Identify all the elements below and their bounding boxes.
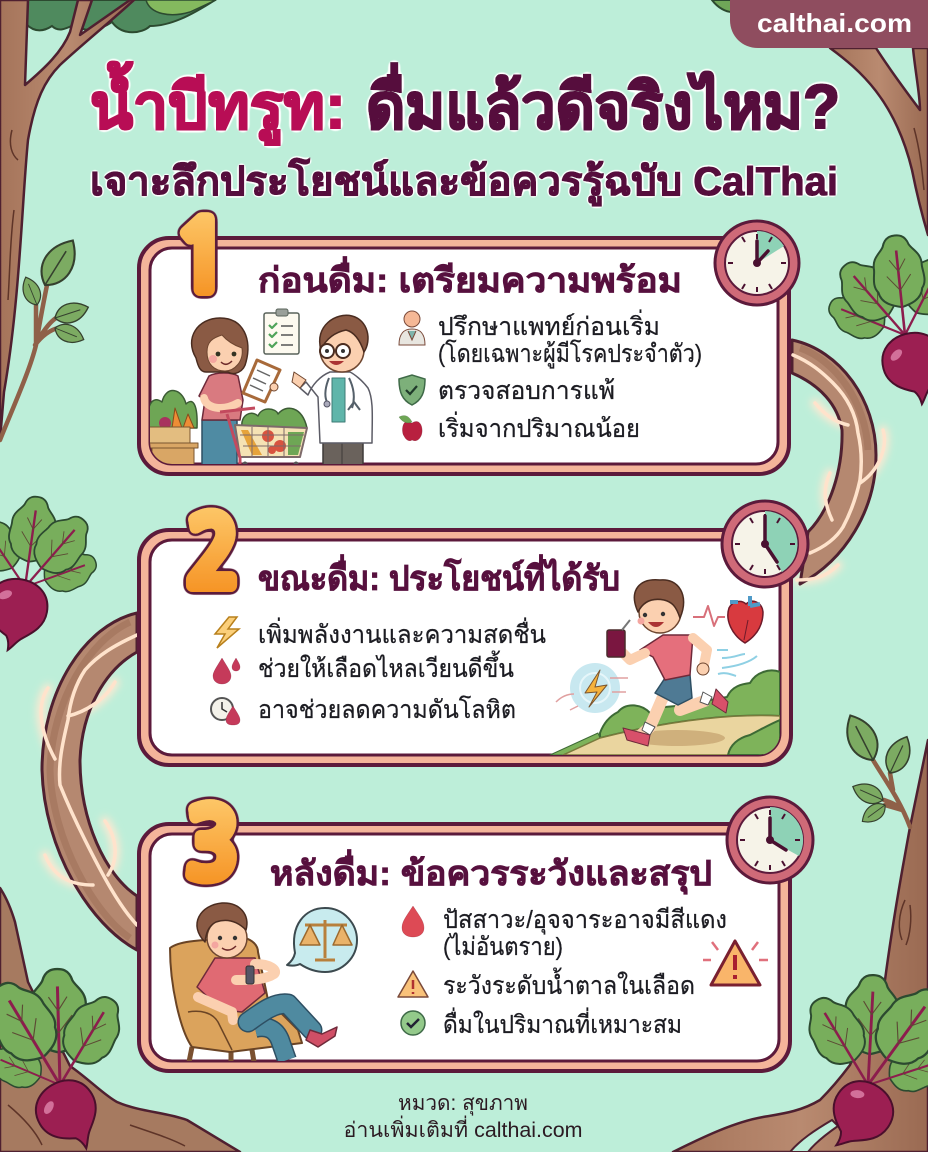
number 1: 1 [173, 210, 231, 305]
panel 2 heading: ขณะดื่ม: ประโยชน์ที่ได้รับ [258, 554, 620, 598]
icon: bolt [215, 617, 239, 648]
number 2: 2 [186, 506, 240, 601]
panel 1 list [399, 309, 702, 443]
beet: bottom right [796, 974, 928, 1152]
beet: left middle [0, 494, 102, 656]
tree: bottom right [673, 740, 928, 1152]
footer category: หมวด: สุขภาพ [398, 1092, 528, 1116]
twig with leaves: left [0, 233, 91, 440]
panel 2 illustration [550, 580, 780, 755]
item: start small: เริ่มจากปริมาณน้อย [438, 411, 640, 443]
twig with leaves: right [838, 709, 917, 828]
icon: shield [399, 375, 425, 405]
item: moderation: ดื่มในปริมาณที่เหมาะสม [443, 1007, 682, 1039]
woman's clipboard [243, 360, 280, 402]
item: consult doctor: ปรึกษาแพทย์ก่อนเริ่ม [438, 309, 660, 341]
panel 2 frame [139, 530, 791, 765]
item: energy: เพิ่มพลังงานและความสดชื่น [258, 617, 546, 649]
tree: bottom left [0, 888, 240, 1152]
title: ดื่มแล้วดีจริงไหม? [366, 63, 840, 142]
warning sign [703, 941, 768, 985]
foliage: top canopy [25, 0, 732, 32]
panel 1 frame [139, 238, 789, 474]
connector vine: panel 2 to panel 3 [41, 613, 137, 950]
number 3: 3 [185, 798, 239, 893]
scale bubble [287, 908, 357, 972]
clock 1 [715, 221, 799, 305]
footer link: อ่านเพิ่มเติมที่ calthai.com [344, 1115, 582, 1142]
heart [693, 596, 763, 643]
motion lines [717, 650, 757, 676]
armchair [170, 938, 302, 1062]
item: blood pressure: อาจช่วยลดความดันโลหิต [258, 695, 516, 724]
brand badge [730, 0, 928, 48]
beet: bottom left [0, 968, 133, 1152]
icon: warning small [398, 971, 428, 997]
item: urine note: (ไม่อันตราย) [443, 932, 563, 961]
energy orb [556, 663, 628, 713]
connector vine: panel 1 to panel 2 [792, 340, 884, 584]
panel 1 illustration [148, 309, 372, 466]
hill and bushes [550, 670, 780, 755]
item: allergy check: ตรวจสอบการแพ้ [438, 377, 615, 405]
panel 1 heading: ก่อนดื่ม: เตรียมความพร้อม [258, 256, 682, 300]
beet: right upper [822, 233, 928, 411]
doctor [292, 315, 372, 466]
brand text: calthai.com [757, 8, 912, 38]
item: blood sugar: ระวังระดับน้ำตาลในเลือด [443, 967, 695, 1000]
title: น้ำบีทรูท: [90, 61, 346, 145]
tree: top left [0, 0, 134, 440]
footer [344, 1092, 582, 1142]
item: consult note: (โดยเฉพาะผู้มีโรคประจำตัว) [438, 339, 702, 369]
icon: blood drops [213, 658, 240, 684]
panel 2 [139, 501, 808, 765]
clock 2 [722, 501, 808, 587]
panel 3 illustration [170, 903, 357, 1062]
panel 2 list [211, 617, 546, 725]
icon: check [401, 1011, 425, 1035]
icon: doctor [399, 311, 425, 345]
panel 3 heading: หลังดื่ม: ข้อควรระวังและสรุป [270, 849, 712, 895]
icon: clock and drop [211, 698, 240, 725]
icon: red drop [402, 906, 424, 937]
panel 3 frame [139, 824, 790, 1071]
panel 3 list [398, 906, 727, 1039]
juice glass [607, 620, 630, 657]
vegetable crate [148, 391, 198, 465]
subtitle: เจาะลึกประโยชน์และข้อควรรู้ฉบับ CalThai [90, 158, 838, 206]
clock 3 [727, 797, 813, 883]
item: circulation: ช่วยให้เลือดไหลเวียนดีขึ้น [258, 650, 514, 683]
panel 3 [139, 797, 813, 1071]
floating checklist [264, 309, 299, 354]
shopping cart [220, 408, 307, 466]
icon: apple [399, 416, 422, 441]
woman [192, 318, 248, 466]
panel 1 [139, 210, 799, 474]
runner [620, 580, 728, 746]
seated man [197, 903, 337, 1060]
item: urine colour: ปัสสาวะ/อุจจาระอาจมีสีแดง [443, 906, 727, 935]
tree: top right [830, 48, 928, 235]
